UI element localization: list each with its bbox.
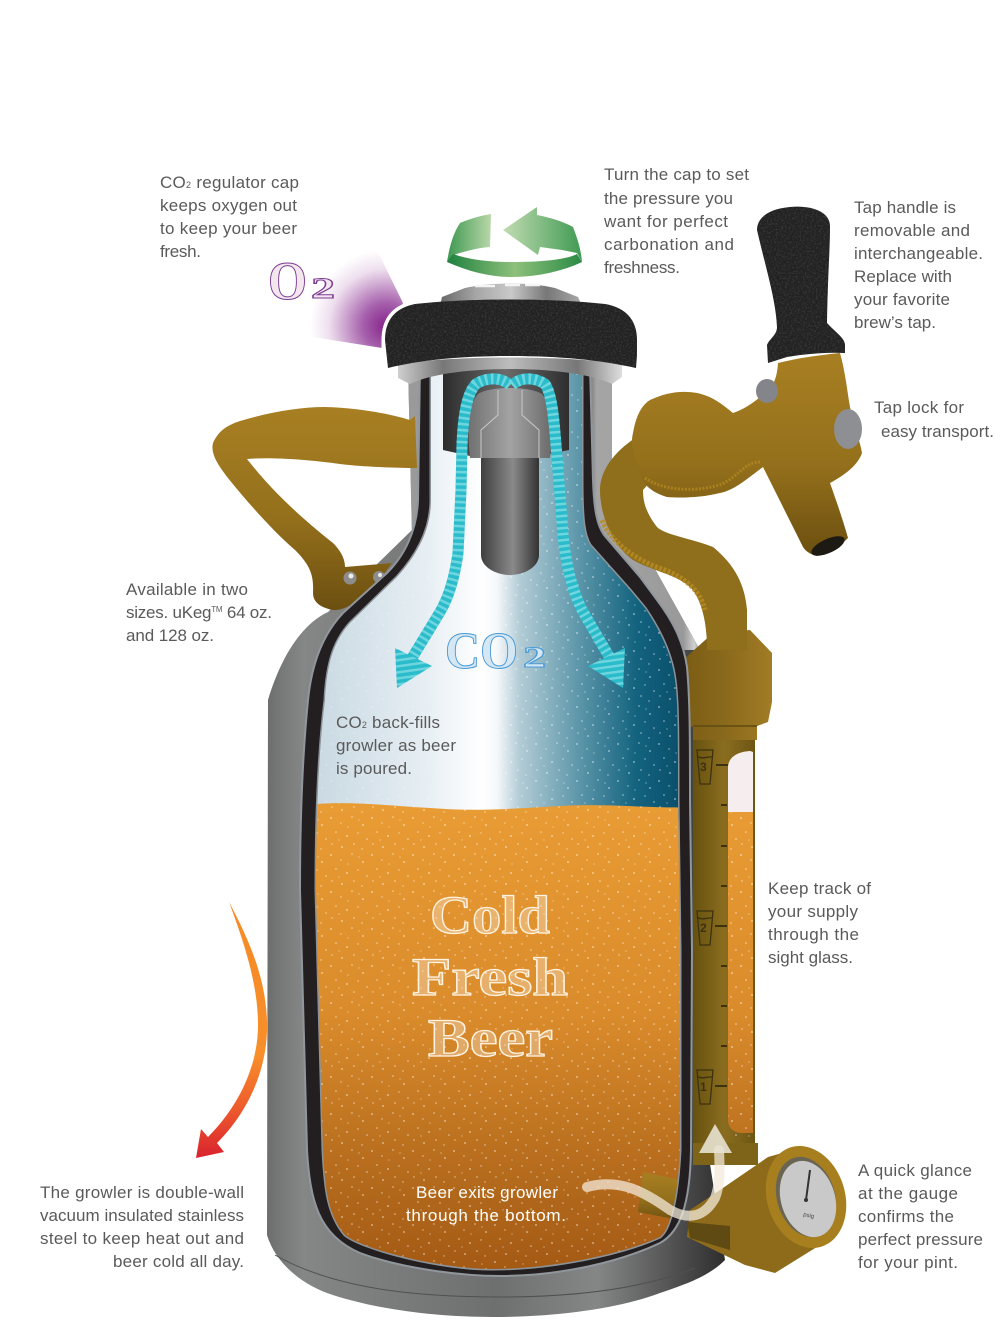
cavity contents [316, 372, 680, 1269]
text: tap handle [854, 198, 983, 332]
text: gauge: at the gauge [858, 1184, 958, 1203]
text: sizes: Available in two [126, 580, 248, 599]
text: turn the cap: freshness. [604, 258, 680, 277]
text: CO2 back-fills: growler as beer [336, 736, 456, 755]
text: sizes: TM [211, 605, 223, 614]
text: regulator cap: fresh. [160, 242, 201, 261]
text: sizes [126, 580, 272, 645]
text: tap handle: Replace with [854, 267, 952, 286]
rotation arrow [447, 207, 582, 277]
text: gauge [858, 1161, 983, 1272]
CO2 flow arrows [395, 379, 625, 688]
CO2 label: CO [445, 623, 518, 680]
text: tap handle: brew’s tap. [854, 313, 936, 332]
text: gauge: perfect pressure [858, 1230, 983, 1249]
sight glass window [728, 751, 753, 1137]
text: beer exits: through the bottom. [406, 1206, 566, 1225]
text: sight glass: Keep track of [768, 879, 871, 898]
text: CO2 back-fills: is poured. [336, 759, 412, 778]
text: regulator cap: keeps oxygen out [160, 196, 297, 215]
internal tap pipe [638, 1172, 678, 1218]
Cold Fresh Beer title: Beer [428, 1008, 553, 1068]
pint markers on sight glass: 2 [700, 921, 707, 935]
text: turn the cap: Turn the cap to set [604, 165, 749, 184]
pint markers on sight glass: 3 [700, 760, 707, 774]
Cold Fresh Beer title [412, 885, 568, 1068]
O2 label: O [268, 251, 307, 311]
text: CO2 back-fills [336, 713, 456, 778]
heat deflection arrow [196, 902, 267, 1158]
beer [316, 803, 680, 1269]
CO2 label: 2 [523, 641, 546, 674]
Cold Fresh Beer title: Fresh [412, 947, 568, 1007]
chrome collar [398, 358, 622, 384]
text: insulation [40, 1183, 244, 1271]
Cold Fresh Beer title: Cold [430, 885, 550, 945]
text: turn the cap: want for perfect [603, 212, 728, 231]
text: CO2 back-fills: CO2 back-fills [336, 713, 440, 732]
text: regulator cap: CO2 regulator cap [160, 173, 299, 192]
text: sight glass: through the [768, 925, 859, 944]
growler body: silver outer shell [267, 365, 725, 1317]
text: gauge: for your pint. [858, 1253, 958, 1272]
text: insulation: steel to keep heat out and [40, 1229, 244, 1248]
tap lock pins [756, 379, 862, 449]
regulator tube assembly [443, 365, 569, 575]
text: insulation: The growler is double-wall [40, 1183, 244, 1202]
tap handle [757, 207, 845, 363]
text: sight glass: your supply [768, 902, 858, 921]
text: regulator cap: to keep your beer [160, 219, 297, 238]
O2 label: 2 [311, 272, 335, 305]
text: turn the cap: carbonation and [604, 235, 734, 254]
text: beer exits: Beer exits growler [416, 1183, 558, 1202]
text: tap lock [874, 398, 994, 441]
text: tap handle: Tap handle is [854, 198, 956, 217]
text: tap handle: removable and [854, 221, 970, 240]
pint markers on sight glass [697, 750, 728, 1104]
regulator knob [440, 284, 582, 306]
text: sizes: sizes. uKeg [126, 603, 212, 622]
tap S-pipe [600, 435, 747, 650]
tap body [632, 353, 862, 560]
text: tap lock: easy transport. [881, 422, 994, 441]
text: gauge: confirms the [858, 1207, 954, 1226]
text: tap handle: your favorite [854, 290, 950, 309]
text: turn the cap [603, 165, 749, 277]
text: regulator cap [160, 173, 299, 261]
text: tap handle: interchangeable. [854, 244, 983, 263]
O2 label [268, 251, 335, 311]
text: sight glass [768, 879, 871, 967]
text: insulation: vacuum insulated stainless [40, 1206, 244, 1225]
text: tap lock: Tap lock for [874, 398, 964, 417]
pressure gauge: psig [803, 1212, 815, 1220]
cutaway: growler double wall [300, 365, 692, 1276]
sight glass column [683, 630, 772, 1155]
text: sizes: and 128 oz. [126, 626, 214, 645]
text: gauge: A quick glance [858, 1161, 972, 1180]
text: beer exits [406, 1183, 566, 1225]
regulator cap [385, 300, 637, 368]
CO2 headspace [316, 372, 678, 820]
beer exit arrow [587, 1124, 732, 1216]
pint markers on sight glass: 1 [700, 1080, 707, 1094]
pressure gauge [687, 1136, 858, 1273]
text: insulation: beer cold all day. [113, 1252, 244, 1271]
text: turn the cap: the pressure you [604, 189, 733, 208]
text: sizes: 64 oz. [222, 603, 272, 622]
oxygen wedge [300, 252, 403, 348]
carrying handle [212, 407, 417, 610]
text: sight glass: sight glass. [768, 948, 853, 967]
